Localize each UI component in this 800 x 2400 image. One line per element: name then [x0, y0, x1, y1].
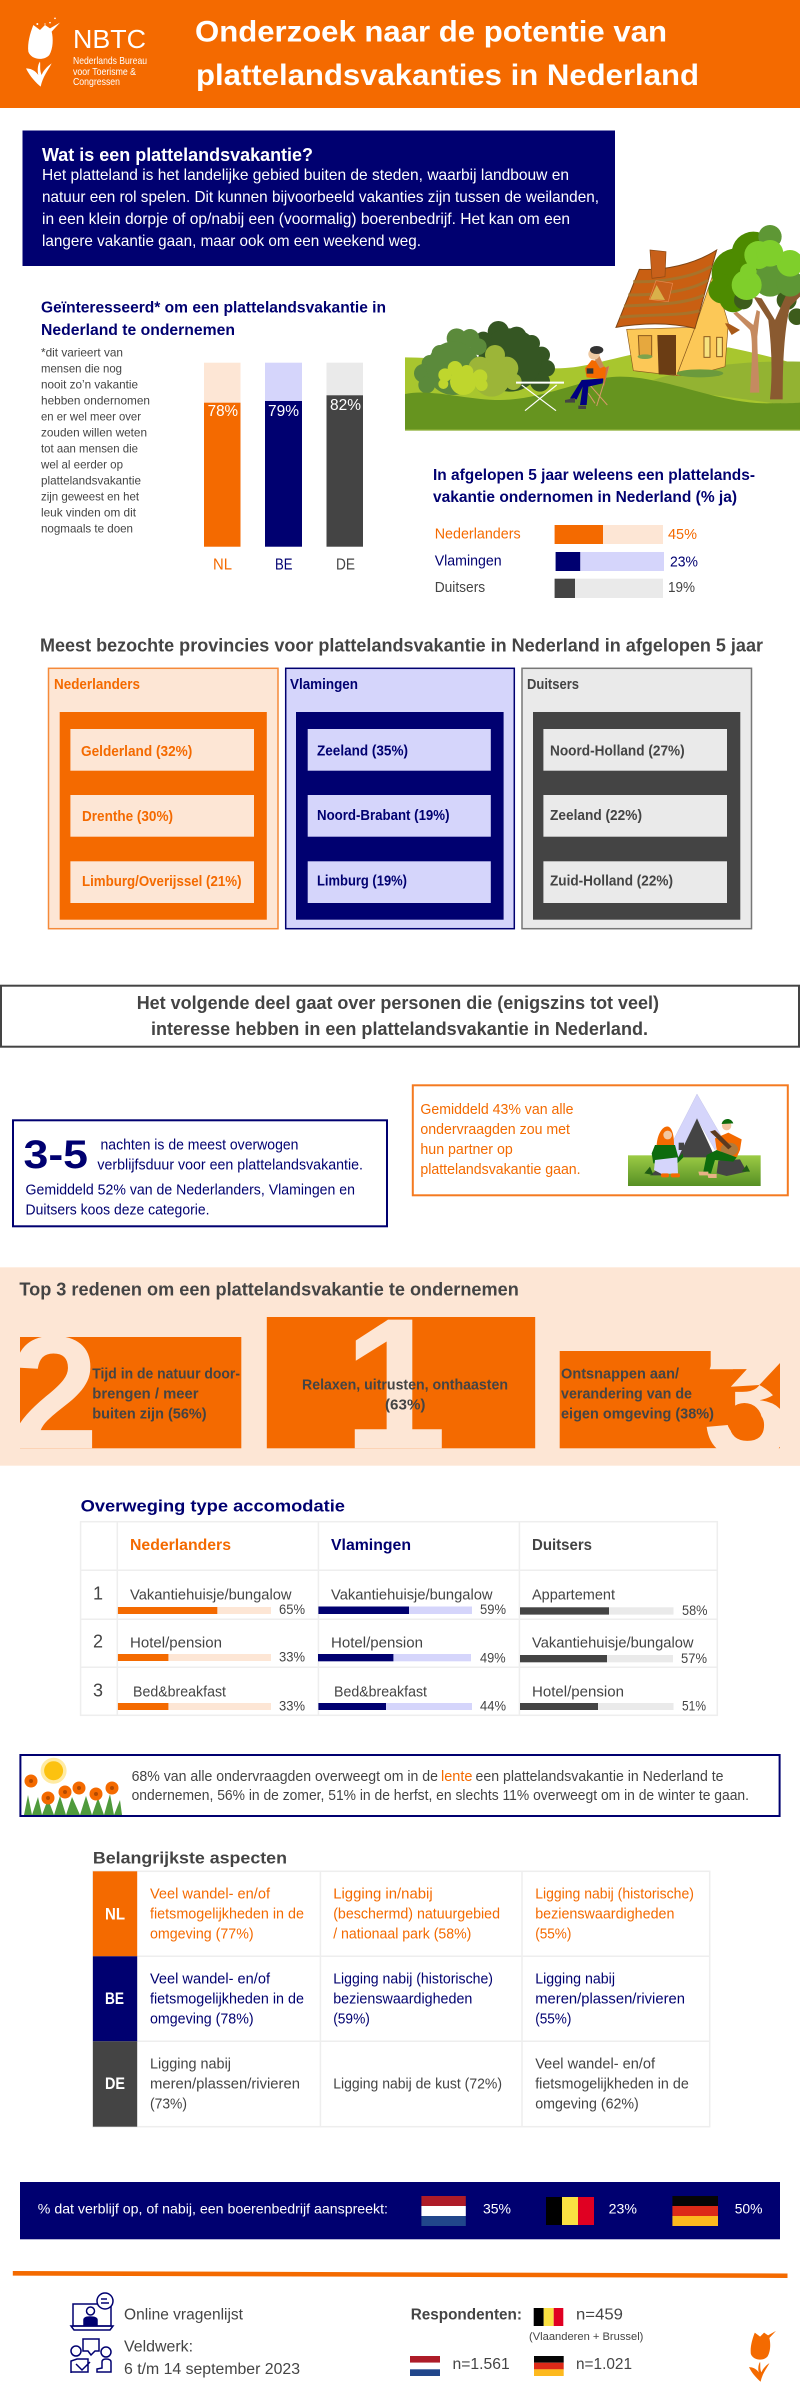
text: fieldwork: Veldwerk: — [124, 2339, 193, 2356]
reason 3: Ontsnappen aan/ — [561, 1366, 679, 1382]
illustration: country house with woman on chair — [405, 225, 800, 431]
row BE: (59%) — [333, 2010, 370, 2027]
row NL: (55%) — [535, 1925, 571, 1942]
row NL — [93, 1871, 694, 1956]
banner: farm stay appeal: 35% — [483, 2201, 511, 2217]
footnote text: plattelandsvakantie — [41, 474, 141, 488]
table header: Nederlanders — [130, 1537, 231, 1554]
flag: Germany small — [534, 2356, 564, 2376]
flag: Belgium small — [534, 2308, 563, 2326]
footnote text: nooit zo’n vakantie — [41, 378, 138, 392]
row BE: Ligging nabij (historische) — [333, 1970, 493, 1987]
row 2: 49% — [480, 1650, 506, 1665]
row 3: 33% — [279, 1699, 305, 1714]
bar chart: last 5 years: 19% — [668, 580, 695, 596]
row 3: 3 — [93, 1680, 103, 1700]
row 2: Hotel/pension — [331, 1634, 423, 1651]
bar chart: interest per country: DE — [336, 556, 355, 573]
divider: orange line — [13, 2271, 788, 2278]
callout: next section note: interesse hebben in een plattelandsvakantie in Nederland. — [151, 1019, 648, 1039]
flag: Netherlands small — [410, 2356, 440, 2376]
flag: Belgium — [546, 2197, 594, 2225]
row BE: fietsmogelijkheden in de — [150, 1990, 304, 2007]
heading: last 5 years: In afgelopen 5 jaar weleens een plattelands- — [433, 467, 755, 484]
bar chart: interest per country: NL — [213, 556, 232, 573]
callout: 3-5 nights: Duitsers koos deze categorie. — [26, 1202, 210, 1218]
callout: seasons: 68% van alle ondervraagden overweegt om in de — [132, 1769, 438, 1785]
row BE: Ligging nabij — [535, 1970, 615, 1987]
table header: Duitsers — [532, 1537, 592, 1554]
icon: flowers and sun — [24, 1758, 122, 1815]
header banner — [0, 0, 800, 108]
footnote text: mensen die nog — [41, 362, 122, 376]
panel: Vlamingen provinces: Zeeland (35%) — [317, 743, 408, 759]
icon: white tulip — [26, 17, 60, 87]
callout: 3-5 nights: Gemiddeld 52% van de Nederlanders, Vlamingen en — [26, 1182, 355, 1198]
row 3: 44% — [480, 1699, 506, 1714]
panel: Duitsers provinces — [522, 668, 752, 929]
row NL: Veel wandel- en/of — [150, 1885, 271, 1902]
row DE: Ligging nabij de kust (72%) — [333, 2075, 502, 2092]
heading: top 3 reasons: Top 3 redenen om een plattelandsvakantie te ondernemen — [19, 1280, 519, 1300]
bar chart: interest per country: BE — [275, 556, 292, 573]
reason 1: (63%) — [385, 1397, 426, 1413]
icon: online survey laptop — [71, 2293, 113, 2330]
row BE: bezienswaardigheden — [333, 1990, 472, 2007]
callout: next section note — [1, 986, 799, 1047]
panel: Vlamingen provinces: Limburg (19%) — [317, 873, 407, 889]
flag: Germany — [672, 2196, 718, 2226]
row DE: Ligging nabij — [150, 2055, 231, 2072]
row 1: Appartement — [532, 1586, 616, 1603]
row 1: 65% — [279, 1602, 305, 1617]
row 2: Hotel/pension — [130, 1634, 222, 1651]
row 1: Vakantiehuisje/bungalow — [130, 1586, 292, 1603]
row BE: meren/plassen/rivieren — [535, 1990, 685, 2007]
row NL: bezienswaardigheden — [535, 1905, 674, 1922]
row NL: fietsmogelijkheden in de — [150, 1905, 304, 1922]
footnote text: en er wel meer over — [41, 410, 141, 424]
panel: Nederlanders provinces: Limburg/Overijssel (21%) — [82, 874, 242, 890]
bar chart: last 5 years: Duitsers — [435, 580, 485, 596]
reason 3: eigen omgeving (38%) — [561, 1406, 714, 1422]
panel: wat is een plattelandsvakantie: in een klein dorpje of op/nabij een (voormalig) boerenbedrijf. Het kan om een — [42, 211, 570, 228]
panel: Nederlanders provinces — [48, 668, 278, 929]
row 3: Bed&breakfast — [334, 1683, 428, 1700]
callout: partner travel: ondervraagden zou met — [420, 1122, 570, 1138]
bar chart: last 5 years: 45% — [668, 527, 697, 543]
banner: farm stay appeal: 23% — [609, 2201, 637, 2217]
row NL: NL — [105, 1905, 125, 1923]
logo: NBTC: voor Toerisme & — [73, 66, 136, 78]
panel: Duitsers provinces: Noord-Holland (27%) — [550, 743, 685, 759]
footnote text: tot aan mensen die — [41, 442, 138, 456]
panel: Vlamingen provinces: Vlamingen — [290, 677, 358, 693]
row NL: Ligging nabij (historische) — [535, 1885, 694, 1902]
reason 3: 3 — [703, 1312, 793, 1492]
respondents: (Vlaanderen + Brussel) — [529, 2331, 643, 2343]
footnote text: leuk vinden om dit — [41, 506, 137, 520]
banner: farm stay appeal — [20, 2182, 780, 2239]
callout: partner travel: plattelandsvakantie gaan. — [420, 1162, 581, 1178]
bar chart: interest per country: 78% — [208, 403, 238, 420]
row 3: Bed&breakfast — [133, 1683, 227, 1700]
reason 2 — [9, 1303, 241, 1483]
callout: seasons: een plattelandsvakantie in Nederland te — [476, 1769, 724, 1785]
logo: NBTC: NBTC — [73, 24, 146, 54]
row DE: Veel wandel- en/of — [535, 2055, 656, 2072]
row 2: 33% — [279, 1649, 305, 1664]
panel: wat is een plattelandsvakantie: Het platteland is het landelijke gebied buiten de steden, waarbij landbouw en — [42, 167, 569, 184]
text: online survey: Online vragenlijst — [124, 2306, 244, 2323]
row 1: 1 — [93, 1583, 103, 1603]
panel: top 3 reasons — [0, 1267, 800, 1492]
row 1: 58% — [682, 1603, 708, 1618]
reason 2: Tijd in de natuur door- — [92, 1366, 240, 1382]
panel: Nederlanders provinces: Gelderland (32%) — [81, 744, 192, 760]
table: accommodation type — [81, 1522, 717, 1715]
row BE: (55%) — [535, 2010, 571, 2027]
flag: Netherlands — [421, 2196, 466, 2226]
respondents: n=1.021 — [576, 2356, 632, 2373]
callout: partner travel — [413, 1085, 788, 1195]
respondents: n=1.561 — [452, 2356, 510, 2373]
heading: accommodation: Overweging type accomodatie — [81, 1497, 345, 1516]
bar chart: interest per country — [204, 363, 363, 573]
row DE: DE — [105, 2075, 125, 2093]
text: fieldwork — [124, 2339, 300, 2378]
banner: farm stay appeal: 50% — [735, 2201, 762, 2217]
panel: wat is een plattelandsvakantie: langere vakantie gaan, maar ook om een weekend weg. — [42, 233, 421, 250]
reason 1 — [267, 1279, 535, 1488]
callout: 3-5 nights — [13, 1120, 387, 1226]
reason 2: buiten zijn (56%) — [92, 1406, 207, 1422]
callout: seasons: ondernemen, 56% in de zomer, 51% in de herfst, en slechts 11% overweegt om in de winter te gaan. — [132, 1788, 749, 1804]
heading: interest: Nederland te ondernemen — [41, 322, 235, 339]
footnote text: zijn geweest en het — [41, 490, 140, 504]
title — [195, 16, 699, 92]
panel: wat is een plattelandsvakantie: natuur een rol spelen. Dit kunnen bijvoorbeeld vakanties zijn tussen de weilanden, — [42, 189, 599, 206]
logo: NBTC — [26, 17, 147, 88]
row BE: BE — [105, 1990, 124, 2008]
callout: 3-5 nights: verblijfsduur voor een plattelandsvakantie. — [97, 1157, 363, 1173]
panel: wat is een plattelandsvakantie — [22, 130, 615, 266]
callout: next section note: Het volgende deel gaat over personen die (enigszins tot veel) — [137, 993, 659, 1013]
reason 3: verandering van de — [561, 1386, 692, 1402]
footnote text: hebben ondernomen — [41, 394, 150, 408]
panel: Nederlanders provinces: Drenthe (30%) — [82, 809, 173, 825]
heading: last 5 years — [433, 467, 755, 506]
heading: aspects: Belangrijkste aspecten — [93, 1848, 287, 1867]
table header — [130, 1537, 592, 1554]
table header: Vlamingen — [331, 1537, 411, 1554]
row BE — [93, 1956, 685, 2041]
bar chart: interest per country: 82% — [330, 397, 361, 414]
row BE: Veel wandel- en/of — [150, 1970, 271, 1987]
respondents — [410, 2306, 643, 2376]
row 2: 2 — [93, 1631, 103, 1651]
illustration: couple at tent — [628, 1094, 761, 1186]
logo: NBTC: Nederlands Bureau — [73, 55, 147, 67]
row NL: / nationaal park (58%) — [333, 1925, 471, 1942]
heading: interest — [41, 300, 386, 339]
footnote text: wel al eerder op — [40, 458, 123, 472]
bar chart: last 5 years: Nederlanders — [435, 526, 521, 542]
row DE: omgeving (62%) — [535, 2095, 639, 2112]
panel: Duitsers provinces: Zuid-Holland (22%) — [550, 873, 673, 889]
respondents: n=459 — [576, 2306, 623, 2323]
panel: Vlamingen provinces — [286, 668, 514, 929]
row 2 — [93, 1631, 707, 1666]
panel: Duitsers provinces: Zeeland (22%) — [550, 808, 642, 824]
row BE: omgeving (78%) — [150, 2010, 254, 2027]
footnote text: *dit varieert van — [41, 346, 123, 360]
reason 2: 2 — [9, 1303, 99, 1483]
banner: farm stay appeal: % dat verblijf op, of nabij, een boerenbedrijf aanspreekt: — [38, 2200, 388, 2216]
row DE: meren/plassen/rivieren — [150, 2075, 300, 2092]
row 3 — [93, 1680, 706, 1714]
reason 2: brengen / meer — [92, 1386, 199, 1402]
callout: seasons: lente — [441, 1769, 472, 1785]
row NL: omgeving (77%) — [150, 1925, 254, 1942]
table: important aspects — [93, 1871, 710, 2127]
row DE: fietsmogelijkheden in de — [535, 2075, 689, 2092]
row 1: Vakantiehuisje/bungalow — [331, 1586, 493, 1603]
callout: seasons — [20, 1755, 780, 1816]
heading: provinces: Meest bezochte provincies voor plattelandsvakantie in Nederland in afgelopen 5 jaar — [40, 636, 763, 656]
footnote text: zouden willen weten — [41, 426, 147, 440]
reason 3 — [560, 1312, 800, 1492]
logo: NBTC: Congressen — [73, 76, 120, 88]
bar chart: last 5 years: Vlamingen — [435, 554, 502, 570]
panel: Duitsers provinces: Duitsers — [527, 677, 579, 693]
footnote text: nogmaals te doen — [41, 522, 133, 536]
row NL: Ligging in/nabij — [333, 1885, 433, 1902]
icon: fieldwork people talking — [71, 2339, 111, 2373]
bar chart: last 5 years: 23% — [670, 555, 698, 571]
reason 1: 1 — [343, 1279, 447, 1488]
row 1: 59% — [480, 1602, 506, 1617]
row 2: 57% — [681, 1651, 707, 1666]
icon: orange tulip — [749, 2331, 776, 2382]
reason 1: Relaxen, uitrusten, onthaasten — [302, 1377, 508, 1393]
heading: interest: Geïnteresseerd* om een plattelandsvakantie in — [41, 300, 386, 317]
row 3: 51% — [682, 1699, 706, 1714]
title: plattelandsvakanties in Nederland — [196, 59, 699, 92]
callout: partner travel: hun partner op — [420, 1142, 513, 1158]
title: Onderzoek naar de potentie van — [195, 16, 667, 49]
row 1 — [93, 1583, 708, 1618]
row DE — [93, 2041, 689, 2127]
row NL: (beschermd) natuurgebied — [333, 1905, 500, 1922]
row 3: Hotel/pension — [532, 1683, 624, 1700]
row DE: (73%) — [150, 2095, 187, 2112]
callout: 3-5 nights: 3-5 — [24, 1133, 88, 1177]
panel: Vlamingen provinces: Noord-Brabant (19%) — [317, 808, 450, 824]
heading: last 5 years: vakantie ondernomen in Nederland (% ja) — [433, 489, 737, 506]
panel: Nederlanders provinces: Nederlanders — [54, 677, 140, 693]
text: fieldwork: 6 t/m 14 september 2023 — [124, 2361, 300, 2378]
panel: wat is een plattelandsvakantie: Wat is een plattelandsvakantie? — [42, 145, 313, 165]
respondents: Respondenten: — [411, 2306, 522, 2323]
bar chart: interest per country: 79% — [268, 403, 299, 420]
callout: partner travel: Gemiddeld 43% van alle — [420, 1102, 574, 1118]
bar chart: last 5 years — [435, 525, 698, 598]
row 2: Vakantiehuisje/bungalow — [532, 1634, 694, 1651]
footnote text — [40, 346, 150, 536]
callout: 3-5 nights: nachten is de meest overwogen — [100, 1137, 298, 1153]
